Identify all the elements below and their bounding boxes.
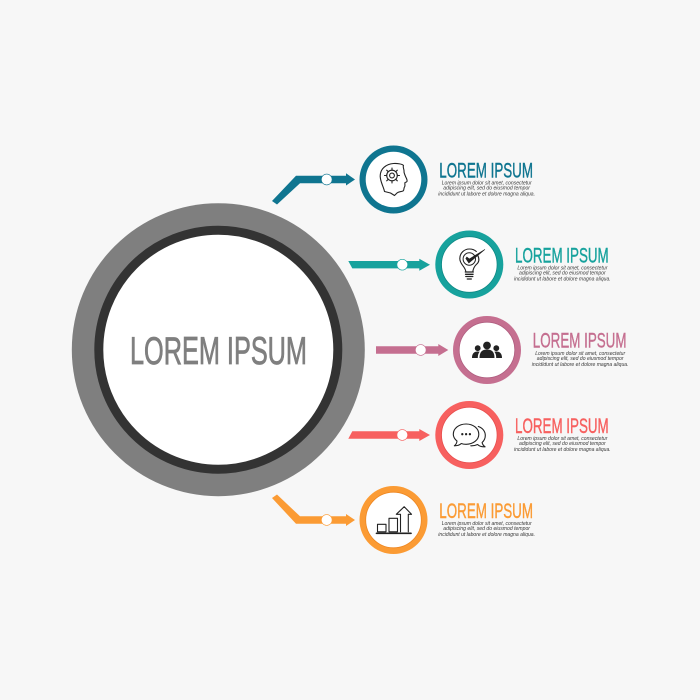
heading: item 3: LOREM IPSUM [533,330,626,352]
body text: item 2: Lorem ipsum dolor sit amet, consectetur [517,265,608,271]
heading: item 5: LOREM IPSUM [439,500,533,523]
icon circle: item 2 [435,230,503,298]
panel: central circle [72,203,365,496]
panel: item 1 teal-blue [272,146,535,214]
body text: item 5: incididunt ut labore et dolore magna aliqua. [438,532,535,538]
panel: item 2 teal [348,230,611,298]
body text: item 5 [438,521,535,538]
body text: item 5: Lorem ipsum dolor sit amet, consectetur [442,521,532,527]
body text: item 3 [532,351,628,368]
panel: item 5 orange [272,486,535,554]
body text: item 1: Lorem ipsum dolor sit amet, consectetur [442,180,532,186]
heading: item 1: LOREM IPSUM [439,160,533,182]
icon: bar chart with arrow [376,507,412,533]
panel: item 3 pink [376,316,628,384]
arrow: item 2 [348,259,430,271]
arrow: item 5 [272,494,355,526]
body text: item 1: adipiscing elit, sed do eiusmod tempor [443,186,530,192]
icon: head with gear [380,163,407,196]
arrow: item 4 [348,429,430,441]
body text: item 2: incididunt ut labore et dolore magna aliqua. [514,276,611,282]
body text: item 5: adipiscing elit, sed do eiusmod tempor [443,526,530,532]
icon: speech bubbles [453,424,485,447]
icon circle: item 5 [360,486,428,554]
icon circle: item 1 [360,146,428,214]
panel: item 4 coral [348,401,611,469]
heading: item 4: LOREM IPSUM [515,415,609,438]
body text: item 4: adipiscing elit, sed do eiusmod tempor [519,441,606,447]
arrow: item 3 [376,344,448,356]
body text: item 4: incididunt ut labore et dolore magna aliqua. [514,447,611,453]
icon: group of people [472,342,502,358]
arrow: item 1 [272,173,355,204]
body text: item 2 [514,265,611,282]
body text: item 3: Lorem ipsum dolor sit amet, consectetur [535,351,625,357]
central heading: LOREM IPSUM [130,330,307,373]
body text: item 3: incididunt ut labore et dolore magna aliqua. [532,362,628,368]
heading: item 2: LOREM IPSUM [515,244,609,268]
body text: item 1: incididunt ut labore et dolore magna aliqua. [438,191,535,197]
body text: item 1 [438,180,535,197]
icon: light bulb with check [460,249,485,279]
body text: item 2: adipiscing elit, sed do eiusmod tempor [519,271,606,277]
body text: item 3: adipiscing elit, sed do eiusmod tempor [537,356,624,362]
body text: item 4: Lorem ipsum dolor sit amet, consectetur [517,436,608,442]
body text: item 4 [514,436,611,453]
icon circle: item 4 [435,401,503,469]
icon circle: item 3 [453,316,521,384]
